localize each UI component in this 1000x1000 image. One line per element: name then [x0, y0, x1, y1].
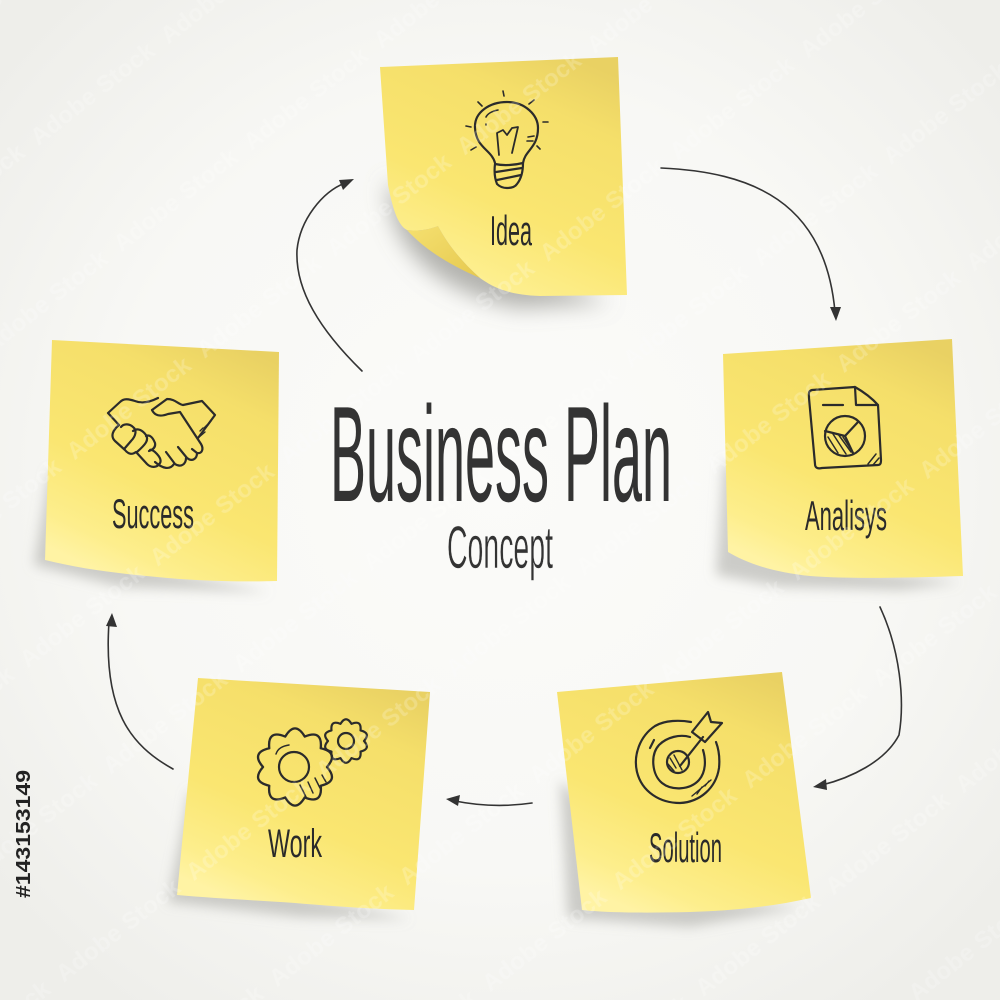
small gear — [325, 719, 367, 763]
sticky note: Idea — [380, 57, 627, 308]
arrow: Idea to Analisys — [661, 168, 841, 321]
sticky note: Work — [168, 678, 430, 919]
icon: target with arrow — [636, 712, 722, 803]
stock image number: #143153149 — [13, 770, 35, 898]
sticky note: Success — [34, 340, 279, 592]
large gear — [258, 728, 332, 806]
note shadow: Work — [168, 790, 410, 919]
note shadow: Solution — [560, 780, 800, 927]
note paper: Solution — [557, 672, 811, 913]
note shadow: Analisys — [716, 460, 960, 590]
label: Work: Work — [268, 822, 323, 866]
note paper: Idea — [380, 57, 627, 296]
arrow: Analisys to Solution — [813, 607, 901, 790]
note paper: Analisys — [723, 339, 963, 578]
label: Idea: Idea — [490, 207, 532, 254]
note shadow: Idea — [388, 180, 610, 308]
sticky note: Analisys — [716, 339, 963, 590]
note paper: Work — [177, 678, 430, 910]
text: Concept — [447, 514, 553, 581]
note shadow: Success — [34, 470, 270, 592]
icon: gears — [258, 719, 367, 806]
note paper: Success — [45, 340, 279, 581]
arrow: Work to Success — [106, 613, 173, 769]
label: Success: Success — [112, 490, 194, 537]
icon: light bulb — [466, 91, 548, 188]
arrow: Success to Idea — [297, 179, 362, 371]
sticky note: Solution: Solution — [649, 824, 722, 871]
icon: report document with pie chart — [809, 387, 881, 468]
label: Analisys: Analisys — [805, 492, 887, 539]
curled corner — [407, 226, 480, 278]
icon: handshake — [108, 398, 215, 468]
arrow: Solution to Work — [446, 795, 532, 806]
sticky note: Solution — [557, 672, 811, 927]
